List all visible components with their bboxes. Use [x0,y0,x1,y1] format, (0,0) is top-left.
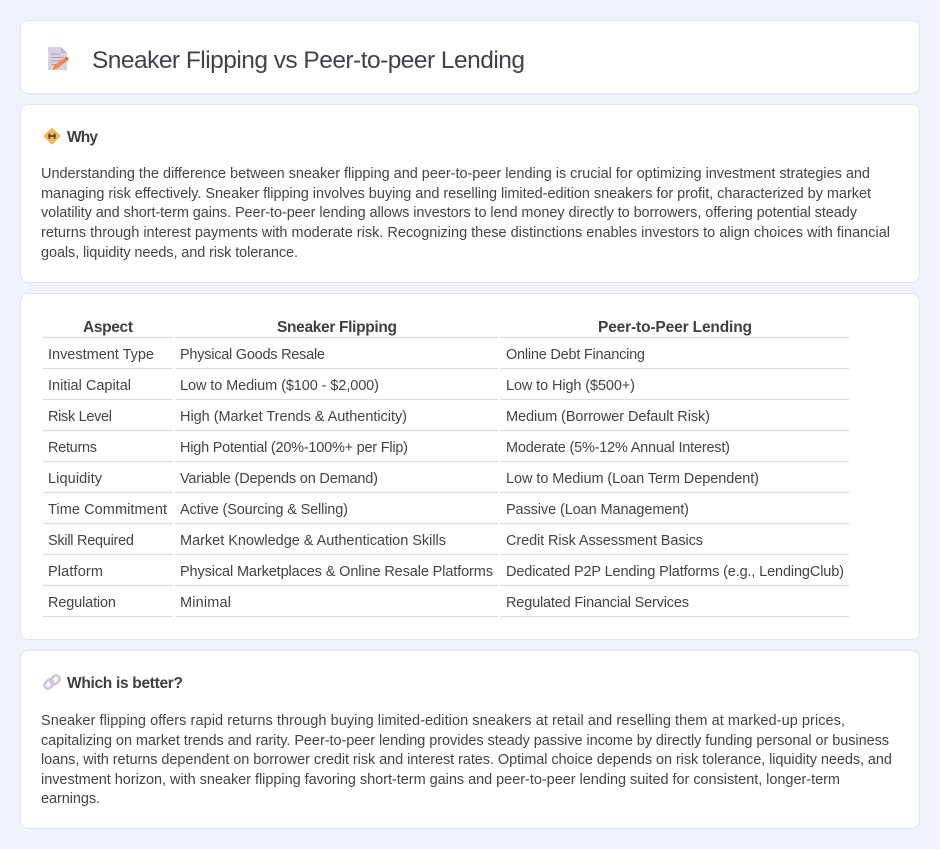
row: initial capital: Low to High ($500+) [506,378,635,394]
row: investment type [48,347,645,363]
row: risk level: Risk Level [48,409,112,425]
row: skill required: Market Knowledge & Authentication Skills [180,533,446,549]
row: returns [48,440,730,456]
text block: why: goals, liquidity needs, and risk tolerance. [41,245,298,261]
row: regulation [48,595,689,611]
row: skill required: Skill Required [48,533,134,549]
row: initial capital: Initial Capital [48,378,131,394]
text block: which is better: earnings. [41,791,100,807]
text block: which is better [41,713,892,807]
row: risk level: Medium (Borrower Default Risk) [506,409,710,425]
text block: which is better: investment horizon, with sneaker flipping favoring short-term gains and peer-to-peer lending suited for consistent, longer-term [41,772,840,788]
row: initial capital: Low to Medium ($100 - $2,000) [180,378,379,394]
panel: comparison table [20,294,920,640]
panel: which is better [20,650,920,828]
row: liquidity: Variable (Depends on Demand) [180,471,378,487]
text block: why: Understanding the difference between sneaker flipping and peer-to-peer lending is crucial for optimizing investment strategies and [41,166,870,182]
text block: why: managing risk effectively. Sneaker flipping involves buying and reselling limited-edition sneakers for profit, characterized by market [41,186,871,202]
panel: why [20,104,920,282]
row: investment type: Online Debt Financing [506,347,645,363]
row: returns: Moderate (5%-12% Annual Interest) [506,440,730,456]
row: returns: Returns [48,440,97,456]
row: investment type: Investment Type [48,347,154,363]
text block: which is better: loans, with returns dependent on borrower credit risk and interest rates. Optimal choice depends on risk tolerance, liquidity needs, and [41,752,892,768]
row: liquidity: Low to Medium (Loan Term Dependent) [506,471,759,487]
row: time commitment: Passive (Loan Management) [506,502,689,518]
row: time commitment: Active (Sourcing & Selling) [180,502,348,518]
table header: Aspect [83,319,133,336]
icon: chain link [43,674,61,690]
row: liquidity: Liquidity [48,471,103,487]
row: regulation: Minimal [180,595,231,611]
row: investment type: Physical Goods Resale [180,347,325,363]
table header: Sneaker Flipping [277,319,397,336]
row: returns: High Potential (20%-100%+ per Flip) [180,440,408,456]
row: platform [48,564,844,580]
row: risk level: High (Market Trends & Authenticity) [180,409,407,425]
icon: warning diamond [44,128,60,144]
row: platform: Physical Marketplaces & Online Resale Platforms [180,564,493,580]
row: platform: Dedicated P2P Lending Platforms (e.g., LendingClub) [506,564,844,580]
table header [83,319,752,336]
text block: why [41,166,890,261]
icon: document with pencil [48,47,69,70]
row: regulation: Regulated Financial Services [506,595,689,611]
title: Sneaker Flipping vs Peer-to-peer Lending [92,47,525,74]
heading: why: Why [67,129,98,146]
text block: why: volatility and short-term gains. Peer-to-peer lending allows investors to lend money directly to borrowers, offering potential steady [41,205,858,221]
row: initial capital [48,378,635,394]
panel: title header [20,20,920,94]
row: liquidity [48,471,759,487]
row: risk level [48,409,710,425]
text block: why: returns through interest payments with moderate risk. Recognizing these distinctions enables investors to align choices with financial [41,225,890,241]
text block: which is better: capitalizing on market trends and rarity. Peer-to-peer lending provides steady passive income by directly funding personal or business [41,733,889,749]
row: platform: Platform [48,564,103,580]
row: skill required [48,533,703,549]
row: time commitment: Time Commitment [48,502,167,518]
row: time commitment [48,502,689,518]
table header: Peer-to-Peer Lending [598,319,752,336]
heading: which is better: Which is better? [67,675,183,692]
text block: which is better: Sneaker flipping offers rapid returns through buying limited-edition sneakers at retail and reselling them at marked-up prices, [41,713,845,729]
row: skill required: Credit Risk Assessment Basics [506,533,703,549]
row: regulation: Regulation [48,595,116,611]
